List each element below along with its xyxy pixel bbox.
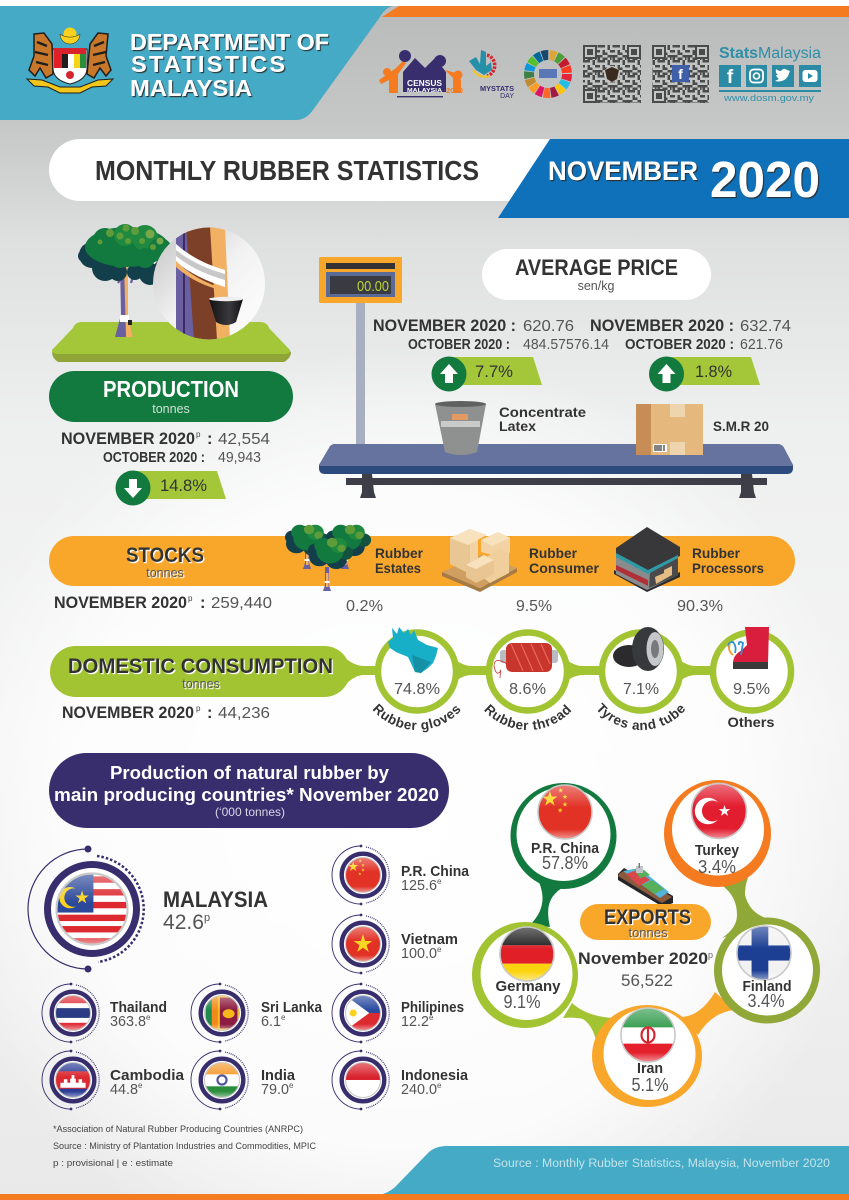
icon: pallet of boxes <box>442 529 517 592</box>
panel: stocks <box>49 525 795 615</box>
item: P.R. China: 125.6 <box>401 878 437 894</box>
node: Finland: 3.4% <box>748 991 784 1011</box>
text: production October figure: OCTOBER 2020 : <box>103 450 205 466</box>
item: Thailand <box>42 983 167 1043</box>
label: rubber consumer: Consumer <box>529 560 600 576</box>
title: department name: DEPARTMENT OF <box>130 29 329 55</box>
heading: stocks: STOCKS <box>126 544 204 567</box>
item: P.R. China: P.R. China <box>401 863 470 880</box>
icon: rubber tree <box>78 224 177 337</box>
item: Vietnam: 100.0 <box>401 946 437 962</box>
item: Sri Lanka: Sri Lanka <box>261 999 323 1016</box>
heading: stocks <box>126 544 204 580</box>
item: Thailand: Thailand <box>110 999 167 1016</box>
badge: production down 14.8%: 14.8% <box>160 476 207 495</box>
item: Vietnam <box>332 914 458 974</box>
text: production November figure: NOVEMBER 2020 <box>61 430 195 448</box>
icon: MyStats Day logo <box>469 50 514 100</box>
item: India: e <box>289 1081 294 1090</box>
panel: exports <box>472 780 820 1107</box>
item: Cambodia <box>42 1050 185 1110</box>
badge: SMR 20 up 1.8% <box>649 356 760 392</box>
item: India: 79.0 <box>261 1082 289 1098</box>
text: stocks total: p <box>188 594 193 603</box>
footnotes: Source : Ministry of Plantation Industries and Commodities, MPIC <box>53 1141 316 1152</box>
item: Philipines: Philipines <box>401 999 464 1016</box>
item: rubber thread <box>484 629 572 730</box>
title banner <box>49 139 849 218</box>
heading: November 2020: NOVEMBER <box>548 156 698 186</box>
header band <box>0 6 849 120</box>
icon: QR code Facebook: f <box>678 66 683 82</box>
item: others: 9.5% <box>733 681 770 698</box>
text: stocks total: NOVEMBER 2020 <box>54 594 187 612</box>
item: P.R. China: e <box>437 877 442 886</box>
heading: November 2020: 2020 <box>710 151 820 208</box>
badge: SMR 20 up 1.8%: 1.8% <box>695 362 732 381</box>
item: Thailand: e <box>146 1013 151 1022</box>
StatsMalaysia social block <box>719 45 821 104</box>
icon: cardboard box <box>636 404 703 455</box>
source line: Source : Monthly Rubber Statistics, Malaysia, November 2020 <box>493 1158 830 1170</box>
pill: production heading: tonnes <box>152 402 190 416</box>
icon: census 2020 logo <box>379 50 463 97</box>
footer <box>0 1146 849 1200</box>
item: rubber gloves <box>372 627 460 732</box>
item: tyres and tube: Tyres and tube <box>598 702 685 730</box>
item: Malaysia: 42.6 <box>163 911 204 934</box>
label: concentrate latex: Latex <box>499 418 536 434</box>
heading: November 2020 <box>548 151 820 208</box>
text: production November figure: : <box>207 430 212 448</box>
label: concentrate latex <box>499 404 586 434</box>
item: Malaysia: MALAYSIA <box>163 887 268 912</box>
node: Turkey <box>664 780 771 887</box>
label: rubber estates: Rubber <box>375 545 424 561</box>
badge: latex up 7.7% <box>432 356 542 392</box>
badge: production down 14.8% <box>116 470 226 506</box>
icon: green platform <box>52 322 291 362</box>
item: Philipines: e <box>429 1013 434 1022</box>
pill: average price heading: AVERAGE PRICE <box>515 255 678 280</box>
item: India <box>191 1050 296 1110</box>
label: rubber estates: Estates <box>375 560 421 576</box>
item: Sri Lanka: 6.1 <box>261 1014 281 1030</box>
connector chain and heading pill: DOMESTIC CONSUMPTION <box>68 655 333 678</box>
item: rubber thread: Rubber thread <box>484 704 572 730</box>
item: tyres and tube: 7.1% <box>623 681 659 698</box>
label: concentrate latex: Concentrate <box>499 404 586 420</box>
item: Cambodia: e <box>138 1081 143 1090</box>
item: rubber thread: 8.6% <box>509 681 546 698</box>
pill: stocks bar <box>49 536 795 586</box>
label: rubber consumer: Rubber <box>529 545 578 561</box>
label: S.M.R 20: S.M.R 20 <box>713 418 769 434</box>
label: rubber processors: Processors <box>692 560 764 576</box>
item: Indonesia: e <box>437 1081 442 1090</box>
text: exports total: 56,522 <box>621 971 673 990</box>
text: SMR 20 prices <box>590 317 791 353</box>
item: Philipines: 12.2 <box>401 1014 429 1030</box>
item: Vietnam: e <box>437 945 442 954</box>
text: consumption total <box>62 704 270 722</box>
pill: average price heading: sen/kg <box>578 279 614 293</box>
text: SMR 20 prices: 621.76 <box>740 337 783 353</box>
heading: stocks: tonnes <box>146 566 184 580</box>
icon: census 2020 logo: 2020 <box>446 88 463 95</box>
node: P.R. China: P.R. China <box>531 840 600 857</box>
item: Malaysia: p <box>204 912 210 924</box>
title: department name: MALAYSIA <box>130 75 252 101</box>
item: Indonesia: 240.0 <box>401 1082 437 1098</box>
icon: cargo ship <box>618 863 673 907</box>
icon: SDG wheel <box>521 47 575 101</box>
text: SMR 20 prices: NOVEMBER 2020 : <box>590 317 734 335</box>
footnotes: p : provisional | e : estimate <box>53 1158 173 1169</box>
text: concentrate latex prices: OCTOBER 2020 : <box>408 337 510 353</box>
node: Germany <box>472 922 578 1028</box>
text: stocks processors share: 90.3% <box>677 598 723 615</box>
icon: tapped trunk with cup <box>153 227 265 340</box>
item: Thailand: 363.8 <box>110 1014 146 1030</box>
text: SMR 20 prices: OCTOBER 2020 : <box>625 337 734 353</box>
text: production October figure: 49,943 <box>218 450 261 466</box>
pill: production heading <box>49 371 293 422</box>
icon: latex bucket <box>435 401 486 455</box>
panel: domestic consumption <box>50 627 794 732</box>
text: concentrate latex prices: 620.76 <box>523 318 574 335</box>
icon: weighing scale with conveyor table: 00.00 <box>357 278 389 295</box>
connector chain and heading pill: tonnes <box>182 677 220 691</box>
item: others: Others <box>728 715 774 730</box>
text: production November figure: 42,554 <box>218 431 270 448</box>
icon: Malaysian coat of arms <box>27 28 113 93</box>
icon: QR code DOSM <box>583 45 641 103</box>
item: Vietnam: Vietnam <box>401 931 458 948</box>
item: Malaysia <box>28 846 268 972</box>
text: consumption total: p <box>196 704 201 713</box>
text: SMR 20 prices: 632.74 <box>740 318 791 335</box>
text: consumption total: : <box>207 704 212 722</box>
node: Turkey: 3.4% <box>698 857 736 877</box>
node: Finland <box>714 918 820 1024</box>
text: stocks total: 259,440 <box>211 595 272 612</box>
icon: census 2020 logo: CENSUS <box>407 79 443 88</box>
item: Cambodia: 44.8 <box>110 1082 138 1098</box>
badge: latex up 7.7%: 7.7% <box>475 362 513 381</box>
node: Germany: 9.1% <box>504 992 540 1012</box>
heading pill: natural rubber by country: main producing countries* November 2020 <box>54 785 439 805</box>
heading pill: natural rubber by country: (‘000 tonnes) <box>215 805 285 819</box>
panel: production by country <box>28 753 470 1169</box>
item: Indonesia: Indonesia <box>401 1067 469 1084</box>
panel: average price <box>319 249 793 498</box>
text: concentrate latex prices <box>373 317 609 353</box>
text: consumption total: NOVEMBER 2020 <box>62 704 194 722</box>
node: P.R. China: 57.8% <box>542 853 588 873</box>
panel: production <box>49 224 293 506</box>
StatsMalaysia social block: www.dosm.gov.my <box>723 93 814 104</box>
heading pill: natural rubber by country <box>49 753 449 828</box>
icon: weighing scale with conveyor table <box>319 257 793 498</box>
icon: rubber processor factory <box>614 527 680 592</box>
footnotes: *Association of Natural Rubber Producing Countries (ANRPC) <box>53 1124 303 1135</box>
heading: monthly rubber statistics: MONTHLY RUBBER STATISTICS <box>95 155 479 186</box>
node: Iran: Iran <box>637 1060 663 1077</box>
heading pill: natural rubber by country: Production of natural rubber by <box>110 763 389 783</box>
text: stocks estates share: 0.2% <box>346 598 383 615</box>
item: India: India <box>261 1067 296 1084</box>
item: rubber gloves: Rubber gloves <box>372 704 460 732</box>
text: exports total <box>578 949 713 990</box>
text: stocks consumer share: 9.5% <box>516 598 552 615</box>
item: others <box>713 627 791 730</box>
title: department name: STATISTICS <box>131 51 285 77</box>
StatsMalaysia social block: StatsMalaysia <box>719 45 821 62</box>
StatsMalaysia social block: f <box>727 67 734 88</box>
item: rubber gloves: 74.8% <box>394 681 440 698</box>
label: rubber processors <box>692 545 764 576</box>
pill: exports heading <box>580 904 711 940</box>
item: Philipines <box>332 983 464 1043</box>
icon: MyStats Day logo: MYSTATS <box>480 84 514 93</box>
text: stocks total <box>54 594 272 612</box>
node: Iran: 5.1% <box>632 1075 668 1095</box>
footnotes <box>53 1124 316 1169</box>
item: tyres and tube <box>598 627 685 730</box>
text: concentrate latex prices: NOVEMBER 2020 : <box>373 317 516 335</box>
network connectors <box>530 878 772 1041</box>
connector chain and heading pill <box>50 646 736 697</box>
pill: exports heading: tonnes <box>628 925 668 940</box>
node: Turkey: Turkey <box>695 842 740 859</box>
icon: census 2020 logo: MALAYSIA <box>407 88 442 94</box>
text: exports total: p <box>708 950 713 960</box>
text: exports total: November 2020 <box>578 949 708 968</box>
label: rubber processors: Rubber <box>692 545 741 561</box>
item: Indonesia <box>332 1050 469 1110</box>
text: consumption total: 44,236 <box>218 705 270 722</box>
pill: production heading: PRODUCTION <box>103 376 239 402</box>
item: Cambodia: Cambodia <box>110 1067 185 1084</box>
icon: rubber estate trees <box>285 525 371 591</box>
node: P.R. China <box>510 783 616 889</box>
text: stocks total: : <box>200 594 206 612</box>
pill: exports heading: EXPORTS <box>604 905 691 929</box>
text: production November figure: p <box>196 430 201 439</box>
node: Finland: Finland <box>742 978 792 995</box>
pill: average price heading <box>482 249 711 300</box>
text: concentrate latex prices: 484.57576.14 <box>523 337 609 353</box>
icon: QR code Facebook <box>652 45 709 103</box>
text: production November figure <box>61 430 270 448</box>
item: P.R. China <box>332 845 470 905</box>
label: rubber consumer <box>529 545 600 576</box>
label: rubber estates <box>375 545 424 576</box>
node: Germany: Germany <box>496 978 561 995</box>
title: department name <box>130 29 329 101</box>
icon: MyStats Day logo: DAY <box>500 93 514 100</box>
node: Iran <box>592 1005 702 1107</box>
item: Sri Lanka: e <box>281 1013 286 1022</box>
item: Sri Lanka <box>191 983 323 1043</box>
